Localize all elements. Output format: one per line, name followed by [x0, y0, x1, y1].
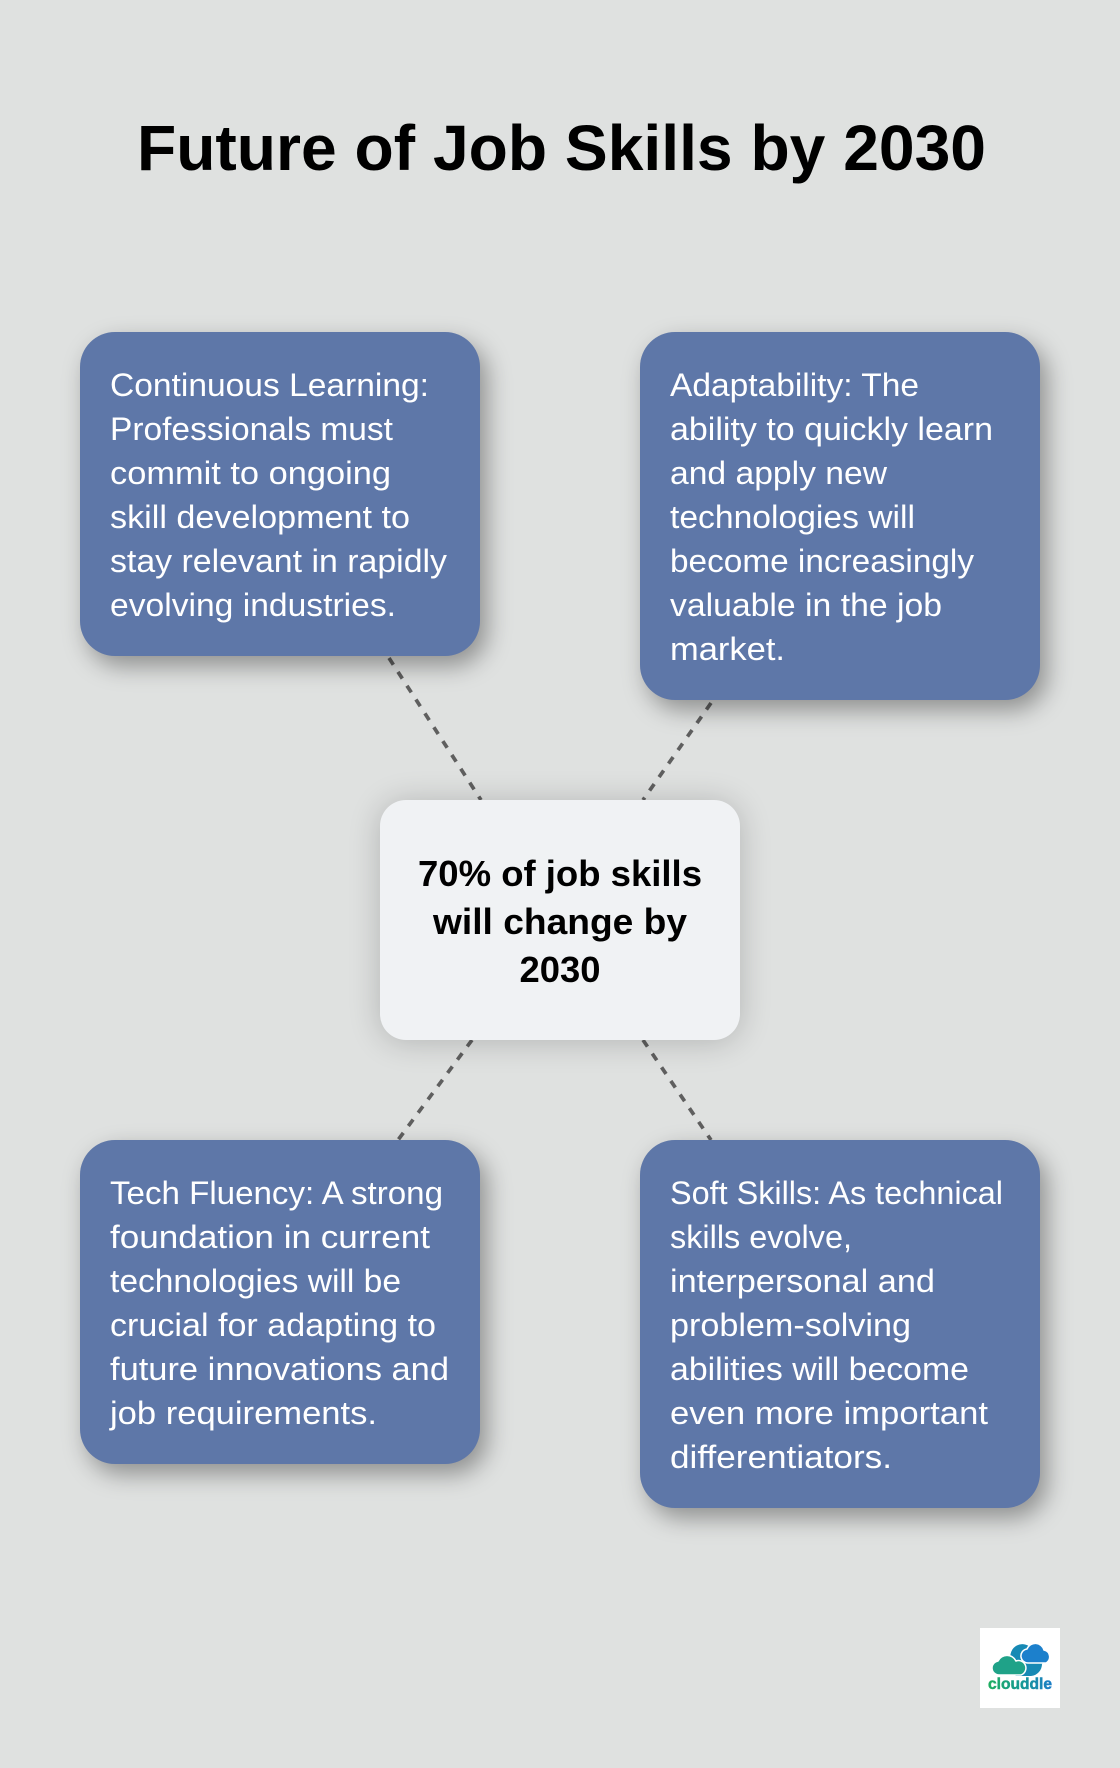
- panel: tech fluency: Tech Fluency: A strong: [110, 1175, 443, 1211]
- icon: clouddle logo: [980, 1628, 1060, 1708]
- panel: central statistic: [380, 800, 740, 1040]
- panel: tech fluency: job requirements.: [109, 1395, 377, 1431]
- panel: soft skills: interpersonal and: [670, 1263, 935, 1299]
- title: Future of Job Skills by 2030: [137, 112, 986, 184]
- panel: continuous learning: [80, 332, 480, 656]
- panel: soft skills: problem-solving: [670, 1307, 911, 1343]
- panel: central statistic: will change by: [432, 901, 687, 942]
- panel: continuous learning: skill development to: [110, 499, 410, 535]
- panel: tech fluency: foundation in current: [110, 1219, 430, 1255]
- panel: soft skills: skills evolve,: [670, 1219, 852, 1255]
- panel: tech fluency: technologies will be: [110, 1263, 401, 1299]
- panel: soft skills: differentiators.: [670, 1439, 892, 1475]
- panel: adaptability: valuable in the job: [670, 587, 942, 623]
- panel: soft skills: even more important: [670, 1395, 988, 1431]
- panel: central statistic: 70% of job skills: [418, 853, 702, 894]
- panel: adaptability: and apply new: [670, 455, 888, 491]
- panel: adaptability: Adaptability: The: [670, 367, 919, 403]
- panel: continuous learning: Continuous Learning:: [110, 367, 429, 403]
- panel: tech fluency: [80, 1140, 480, 1464]
- panel: soft skills: abilities will become: [670, 1351, 969, 1387]
- icon: clouddle logo: clouddle: [988, 1676, 1052, 1693]
- panel: soft skills: Soft Skills: As technical: [670, 1175, 1003, 1211]
- panel: central statistic: 2030: [520, 949, 600, 990]
- panel: continuous learning: Professionals must: [110, 411, 393, 447]
- panel: tech fluency: future innovations and: [110, 1351, 449, 1387]
- panel: tech fluency: crucial for adapting to: [110, 1307, 436, 1343]
- panel: continuous learning: commit to ongoing: [110, 455, 391, 491]
- panel: adaptability: ability to quickly learn: [670, 411, 993, 447]
- panel: continuous learning: stay relevant in rapidly: [110, 543, 448, 579]
- panel: soft skills: [640, 1140, 1040, 1508]
- panel: continuous learning: evolving industries.: [110, 587, 396, 623]
- panel: adaptability: become increasingly: [670, 543, 975, 579]
- panel: adaptability: [640, 332, 1040, 700]
- panel: adaptability: market.: [670, 631, 785, 667]
- panel: adaptability: technologies will: [670, 499, 915, 535]
